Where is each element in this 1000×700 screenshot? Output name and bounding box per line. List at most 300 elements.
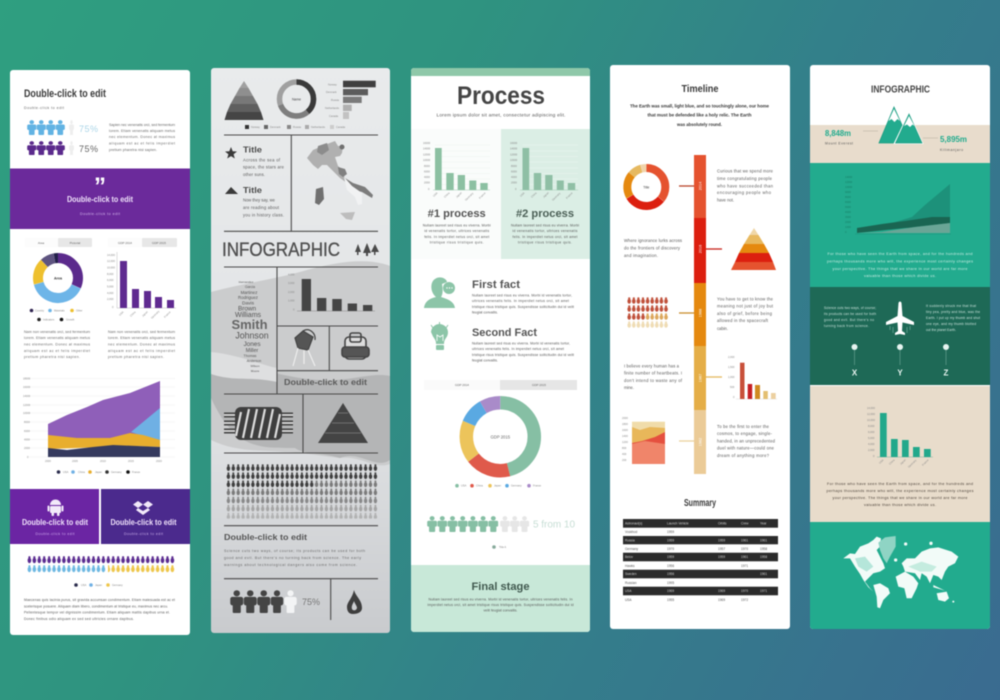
stacked area chart: 2015 <box>128 459 134 463</box>
beige mountain band <box>810 125 990 163</box>
column 1: process: France <box>478 191 487 200</box>
pictogram: blue people 75% <box>27 120 98 135</box>
stat: Kilimanjaro: 5,895m <box>940 135 967 144</box>
area chart: warm: 800 <box>622 446 627 450</box>
pictogram: blue people 75%: 75% <box>79 124 98 134</box>
bar chart: teal: 5,000 <box>868 436 875 440</box>
chart legend: Norway <box>251 125 260 129</box>
purple card: android <box>10 489 99 544</box>
green map band <box>810 522 990 629</box>
text: left column: pretium pharetra nisi sapien. <box>24 355 80 359</box>
donut legend: China <box>476 484 483 488</box>
data table: Russia <box>625 538 635 542</box>
icon: mountains <box>879 107 922 143</box>
chart tabs: GDP: GDP 2014 <box>118 241 132 245</box>
donut legend: Country <box>35 308 45 312</box>
pictogram grid <box>627 297 668 329</box>
pictogram rows <box>27 556 175 573</box>
area chart: warm: 2000 <box>622 416 628 420</box>
text on beige band: your perspective. The things that we share in our world are far more <box>832 496 968 500</box>
data table: 1959 <box>667 555 674 559</box>
column 2: process: felis. In imperdiet netus orci, sit amet <box>512 235 578 239</box>
data table: Orbits <box>718 522 727 526</box>
stat: Mount Everest: 8,848m <box>825 129 851 138</box>
text on beige band: For those who have seen the Earth from space, and for the hundreds and <box>827 482 973 486</box>
column 1: process: tristique risus tristique quis. <box>430 240 484 244</box>
donut legend: Germany <box>511 484 522 488</box>
subheading and body text: good and evil. But there's no turning back from science. The early <box>224 556 361 560</box>
area chart: green: 6000 <box>845 200 851 204</box>
stacked area chart: 2005 <box>72 459 78 463</box>
donut chart: title: Title <box>643 186 650 190</box>
area chart: green: 0 <box>845 230 847 234</box>
purple card: dropbox: Double-click to edit <box>110 517 177 527</box>
word cloud <box>231 280 269 373</box>
area chart: green: 1000 <box>845 225 851 229</box>
panel 1: purple infographic <box>10 70 190 635</box>
second title with description: you in history class. <box>243 212 284 218</box>
area chart: green: 12000 <box>845 180 853 184</box>
chart legend <box>245 125 346 129</box>
column 1: process: 12000 <box>423 152 431 156</box>
bar chart: warm: 1,000 <box>728 375 735 379</box>
data table: USA <box>625 598 632 602</box>
text: curious: time congratulating people <box>717 176 773 181</box>
pictogram legend: Germany <box>112 583 123 587</box>
data table: 1957 <box>718 547 725 551</box>
text: heartbeats <box>624 364 683 390</box>
icon: android <box>48 500 64 516</box>
dark green band <box>810 287 990 385</box>
final stage band <box>411 565 590 632</box>
area chart: warm: 400 <box>622 452 627 456</box>
bar chart: teal: 6,000 <box>868 430 875 434</box>
bar chart: purple: Germany <box>150 309 161 320</box>
bar chart: warm: 0 <box>733 395 735 399</box>
text on green band: perhaps thousands more who will, the experience most certainly changes <box>827 260 973 264</box>
column 2: process: 14000 <box>510 146 518 150</box>
donut chart: GDP 2015 <box>453 389 548 484</box>
word cloud: Williams <box>235 312 262 319</box>
column 1: process: #1 process <box>428 208 486 220</box>
column 1: process: 2000 <box>424 180 430 184</box>
bar chart: teal: Germany <box>907 458 918 469</box>
text: curious: who have succeeded than <box>717 184 774 188</box>
final stage band: velit feugiat convallis. <box>484 608 518 612</box>
footer text: scelerisque posuere. Aliquam diam libero, condimentum at tristique eu, maximus nec arcu. <box>24 604 168 608</box>
data table: Voskhod <box>625 530 637 534</box>
column 1: process: Nullam laoreet sed risus eu viverra. Morbi <box>423 224 491 228</box>
data table: 1969 <box>667 589 674 593</box>
pictogram legend: Title A <box>499 545 506 549</box>
fog and landscape backdrop <box>211 261 390 465</box>
purple quote band: Double-click to edit <box>80 212 120 216</box>
chart tabs: area <box>25 238 92 247</box>
text: heartbeats: don't intend to waste any of <box>624 378 683 383</box>
data table: 1958 <box>760 555 767 559</box>
donut legend: USA <box>461 484 467 488</box>
icon: light bulb <box>431 322 448 350</box>
word cloud: Johnson <box>235 330 269 340</box>
stat: Mount Everest: Mount Everest <box>825 142 853 146</box>
bar chart: purple <box>107 252 176 320</box>
text: first to enter: dream of anything more? <box>717 453 770 458</box>
donut legend <box>455 484 542 488</box>
bar chart: teal: 2,000 <box>868 448 875 452</box>
area chart: warm: 1400 <box>622 434 628 438</box>
text: ignorance: and imagination. <box>624 253 658 258</box>
bar chart: purple: USA <box>118 310 125 317</box>
horizontal bar chart: Canada <box>329 114 339 118</box>
title with description <box>243 145 285 177</box>
intro text: nec elementum. Donec at maximus <box>109 135 175 139</box>
column 2: process: 12000 <box>510 152 518 156</box>
icon: mountain <box>225 187 238 194</box>
horizontal bar chart: Denmark <box>326 90 337 94</box>
data table: 1959 <box>718 538 725 542</box>
text: grief: cabin. <box>717 326 728 331</box>
timeline bar: 1982 <box>698 438 702 446</box>
chart tabs: area: Pictorial <box>70 241 81 245</box>
intro text <box>630 104 770 127</box>
panel 4: timeline infographic <box>610 65 790 629</box>
text: curious: have not. <box>717 198 734 202</box>
text: grief: You have to get to know the <box>717 296 774 302</box>
stacked area chart: 4000 <box>24 438 30 442</box>
beige chart band <box>810 386 990 522</box>
text: left column: aliquam est ac et felis imperdiet <box>24 349 90 353</box>
bar chart: purple: 4,000 <box>107 291 114 295</box>
text: first to enter: cosmos, to engage, single- <box>717 431 773 436</box>
icon: rope <box>224 407 293 440</box>
bar chart: teal: France <box>921 458 930 467</box>
subheading: double-click: Double-click to edit <box>284 377 367 387</box>
map of Italy <box>307 141 373 220</box>
panel 3: process infographic <box>411 68 590 632</box>
heading: Double-click to edit <box>24 88 106 100</box>
markers: Y: Y <box>897 368 903 378</box>
data table: 1972 <box>741 598 748 602</box>
data table: 1969 <box>718 589 725 593</box>
text: curious <box>717 168 774 202</box>
green chart band <box>810 163 990 287</box>
bar chart: warm: 1,500 <box>728 365 735 369</box>
area chart: warm: 200 <box>622 458 627 462</box>
column 2: process: Germany <box>551 191 562 202</box>
title with description: space, the stars are <box>243 164 285 170</box>
footer text: Pellentesque tempor vel dignissim condimentum. Etiam aliquam mattis dapibus urna et. <box>24 610 170 614</box>
column 2: process: China <box>530 191 538 199</box>
donut legend: Japan <box>494 484 502 488</box>
pyramid: colored <box>731 228 776 270</box>
area chart: green: 14000 <box>845 175 853 179</box>
stat: Kilimanjaro: Kilimanjaro <box>940 148 963 152</box>
footer text: Donec finibus odio aliquam ex sed sed ultricies ornare dapibus. <box>24 617 134 621</box>
second title with description: Title <box>243 185 262 195</box>
data table: 1971 <box>760 589 767 593</box>
markers: X <box>852 344 858 378</box>
icon: dropbox <box>133 501 153 515</box>
footer text <box>24 598 175 621</box>
final stage band: Nullam laoreet sed risus eu viverra. Morbi id venenatis tortor, ultrices venenatis felis. In <box>428 598 573 602</box>
column 2: process: Japan <box>542 190 550 199</box>
subheading and body text <box>224 532 365 567</box>
text: right column: nec elementum. Donec at maximus <box>108 342 175 346</box>
area chart: green: 10000 <box>845 185 853 189</box>
title with description: Title <box>243 145 262 155</box>
word cloud: Davis <box>242 300 255 306</box>
column 1: process: 8000 <box>424 164 430 168</box>
footer text: Maecenas quis lacinia purus, sit gravida accumsan condimentum. Etiam malesuada est ac et <box>24 598 175 602</box>
area chart: green: 9000 <box>845 190 851 194</box>
data table: 1959 <box>667 538 674 542</box>
text: left column: lorem. Etiam venenatis aliquam metus <box>24 336 90 340</box>
pictogram: purple people 75% <box>27 141 98 155</box>
chart tabs: GDP: GDP 2015 <box>532 383 546 387</box>
bar chart: warm: 2,000 <box>728 355 735 359</box>
data table: 1970 <box>741 589 748 593</box>
column 2: process: #2 process <box>516 208 574 220</box>
purple card: android: Double-click to edit <box>36 532 74 536</box>
text: right column: pretium pharetra nisi sapien. <box>108 355 164 359</box>
column 2: process: id venenatis tortor, ultrices venenatis <box>512 229 578 233</box>
text: dark band left: turning back from science. <box>824 324 869 328</box>
intro text: that must be defended like a holy relic. The Earth <box>648 112 752 118</box>
first fact: feugiat convallis. <box>472 310 498 314</box>
word cloud: Wilson <box>250 364 260 368</box>
top strip <box>411 68 590 76</box>
column 1: process: 4000 <box>424 175 430 179</box>
pyramid <box>224 81 264 120</box>
subheading and body text: warnings about technological dangers also come from science. <box>224 563 357 567</box>
column 2: process: 0 <box>515 187 517 191</box>
timeline bar: 2014 <box>698 182 702 190</box>
column 1: process: China <box>443 191 451 199</box>
text: left column: nec elementum. Donec at maximus <box>24 342 90 346</box>
text: first to enter: handed, in an unprecedented <box>717 438 776 444</box>
column 2: process: 10000 <box>510 158 518 162</box>
bar chart: teal: 0 <box>873 454 875 458</box>
column 2: process: France <box>565 191 574 200</box>
title with description: Across the sea of <box>243 158 281 162</box>
word cloud: Anderson <box>247 359 261 363</box>
data table: 1970 <box>741 547 748 551</box>
chart legend: Netherlands <box>311 125 326 129</box>
column 1: process: 16000 <box>423 141 431 145</box>
icon: camp chair <box>293 330 315 366</box>
stacked area chart: 18000 <box>23 376 31 380</box>
word cloud: Moore <box>251 369 260 373</box>
area chart: green: 5000 <box>845 205 851 209</box>
text: ignorance: do the frontiers of discovery <box>624 246 681 250</box>
data table: Hawks <box>625 564 635 568</box>
stacked area chart <box>23 376 175 463</box>
stacked area chart: 10000 <box>23 411 31 415</box>
purple card: android: Double-click to edit <box>22 517 88 527</box>
bar chart: teal <box>867 406 933 469</box>
markers: X: X <box>852 368 858 378</box>
bar chart: purple: 5,000 <box>107 284 114 288</box>
stacked area chart: 6000 <box>24 429 30 433</box>
icon: person with speech bubble <box>424 277 455 308</box>
text: dark band left: good and evil. But there's no <box>824 318 874 322</box>
first fact: tristique risus tristique quis. Suspendisse sollicitudin dui id velit <box>472 305 574 309</box>
pictogram legend <box>492 545 506 549</box>
donut chart: area: Area <box>54 276 63 280</box>
donut legend: Other <box>76 308 83 312</box>
word cloud: Thomas <box>244 354 257 358</box>
area chart legend: China <box>78 470 85 474</box>
stat: Mount Everest <box>825 129 878 146</box>
data table: 1959 <box>667 530 674 534</box>
area chart: green <box>845 175 951 234</box>
pyramid: dark <box>318 403 368 443</box>
text: dark band right <box>926 304 980 332</box>
text: grief: meaning not just of joy but <box>717 304 774 308</box>
purple card: dropbox <box>101 489 190 544</box>
area chart: green: 4000 <box>845 210 851 214</box>
heading: INFOGRAPHIC: INFOGRAPHIC <box>222 240 340 261</box>
donut legend: Materials <box>54 308 65 312</box>
icon: trees <box>355 243 379 256</box>
data table: Sweden <box>625 572 637 576</box>
intro text: was absolutely round. <box>676 122 722 127</box>
second title with description <box>243 185 284 218</box>
column 1: process: 14000 <box>423 146 431 150</box>
area chart: green: 3000 <box>845 215 851 219</box>
first fact: Nullam laoreet sed risus eu viverra. Morbi id venenatis tortor, <box>472 294 572 298</box>
data table: Launch Vehicle <box>667 522 689 526</box>
data table: Astronaut(s) <box>625 522 642 526</box>
subheading: Double-click to edit <box>24 106 64 110</box>
icon: backpack <box>342 333 369 359</box>
icon: flame <box>347 590 362 614</box>
pictogram: people 75%: 75% <box>302 597 320 607</box>
second fact: tristique risus tristique quis. Suspendisse sollicitudin dui id velit <box>472 353 574 357</box>
first fact: First fact <box>472 279 520 291</box>
data table: 1956 <box>667 572 674 576</box>
first fact: ultrices venenatis felis. In imperdiet netus orci, sit amet <box>472 299 569 303</box>
word cloud: Jones <box>243 341 261 348</box>
heading: process: Process <box>457 82 545 110</box>
column 1: process: 6000 <box>424 170 430 174</box>
area chart: green: 8000 <box>845 195 851 199</box>
chart legend: Canada <box>336 125 346 129</box>
text: dark band left: its products can be used for both <box>824 312 876 316</box>
purple quote band: ” <box>94 173 106 200</box>
markers: Z <box>943 344 949 378</box>
text on beige band: valuable than those which divide us. <box>864 503 936 507</box>
horizontal bar chart: Norway <box>328 82 337 86</box>
bar chart: purple: 14,000 <box>107 253 115 257</box>
data table: 1958 <box>760 547 767 551</box>
text: curious: encouraging people who <box>717 190 772 195</box>
bar chart: teal: 12,000 <box>867 412 875 416</box>
second title with description: are reading about <box>243 205 280 210</box>
pictogram: people 75% <box>230 590 320 613</box>
bar chart: purple: France <box>163 310 172 319</box>
column 2: process: 4000 <box>511 175 517 179</box>
text: dark band right: Earth. I put up my thumb and shut <box>926 316 980 320</box>
column 2: process: USA <box>519 191 526 198</box>
chart legend: Denmark <box>270 125 281 129</box>
column 1: process: Germany <box>464 191 475 202</box>
final stage band: Final stage <box>472 581 530 593</box>
stacked area chart: 2010 <box>100 459 106 463</box>
text: right column: Nam non venenatis orci, sed fermentum <box>108 330 175 334</box>
first fact <box>472 279 574 314</box>
text: first to enter: To be the first to enter the <box>717 424 770 429</box>
stacked area chart: 0 <box>27 455 29 459</box>
text: dark band right: It suddenly struck me that that <box>926 304 976 308</box>
area chart legend: Japan <box>95 470 103 474</box>
bar chart: teal: Japan <box>899 457 907 466</box>
stat: Kilimanjaro <box>923 135 967 152</box>
column 2: process <box>501 129 590 259</box>
text: dark band left: Science cuts two ways, of course; <box>824 306 876 310</box>
data table: 1959 <box>718 555 725 559</box>
pictogram grid <box>226 464 378 519</box>
column 2: process: 16000 <box>510 141 518 145</box>
word cloud: Rodriguez <box>238 295 258 300</box>
pictogram legend: Japan <box>95 583 103 587</box>
bar chart: teal: USA <box>878 458 885 465</box>
stacked area chart: 12000 <box>23 403 31 407</box>
pictogram: 5 from 10 <box>427 516 575 532</box>
bar chart: purple: 8,000 <box>107 272 114 276</box>
divider grid lines <box>224 135 378 620</box>
pictogram legend <box>74 583 123 587</box>
bar chart: grey: 2,000 <box>288 290 295 294</box>
word cloud: Hernandez <box>239 280 254 284</box>
column 1: process: 0 <box>428 187 430 191</box>
intro text: Sapien nec venenatis orci, sed fermentum <box>109 123 175 127</box>
bar chart: teal: 4,000 <box>868 442 875 446</box>
text: right column <box>108 330 175 359</box>
donut legend: Indicators <box>43 318 55 322</box>
intro text <box>109 123 175 152</box>
second fact: Nullam laoreet sed risus eu viverra. Morbi id venenatis tortor, <box>472 342 570 346</box>
donut: name: Name <box>292 98 301 102</box>
markers: Y <box>897 344 903 378</box>
chart tabs: GDP: GDP 2015 <box>152 241 166 245</box>
markers: Z: Z <box>944 368 949 378</box>
text: heartbeats: finite number of heartbeats. I <box>624 370 682 376</box>
text: ignorance: Where ignorance lurks across <box>624 238 682 243</box>
word cloud: Smith <box>231 317 268 332</box>
intro text: aliquam est ac et felis imperdiet <box>109 142 175 146</box>
data table: 1969 <box>718 598 725 602</box>
area chart legend: France <box>132 470 141 474</box>
data table <box>623 519 778 602</box>
bar chart: grey: 1,000 <box>288 298 295 302</box>
word cloud: Miller <box>246 348 258 354</box>
bar chart: purple: China <box>129 310 137 318</box>
data table: 1961 <box>741 555 748 559</box>
intro text: The Earth was small, light blue, and so touchingly alone, our home <box>630 104 770 108</box>
column 1: process: Japan <box>455 190 463 199</box>
bar chart: purple: 12,000 <box>107 259 115 263</box>
second fact: Second Fact <box>472 327 537 339</box>
bar chart: warm <box>728 355 777 399</box>
bar chart: grey: 0 <box>293 308 295 312</box>
text: left column <box>24 330 90 359</box>
connectors <box>679 186 722 441</box>
area chart legend: Germany <box>111 470 122 474</box>
donut chart: title <box>620 160 673 214</box>
data table: 1995 <box>667 581 674 585</box>
area chart: warm: 1800 <box>622 422 628 426</box>
